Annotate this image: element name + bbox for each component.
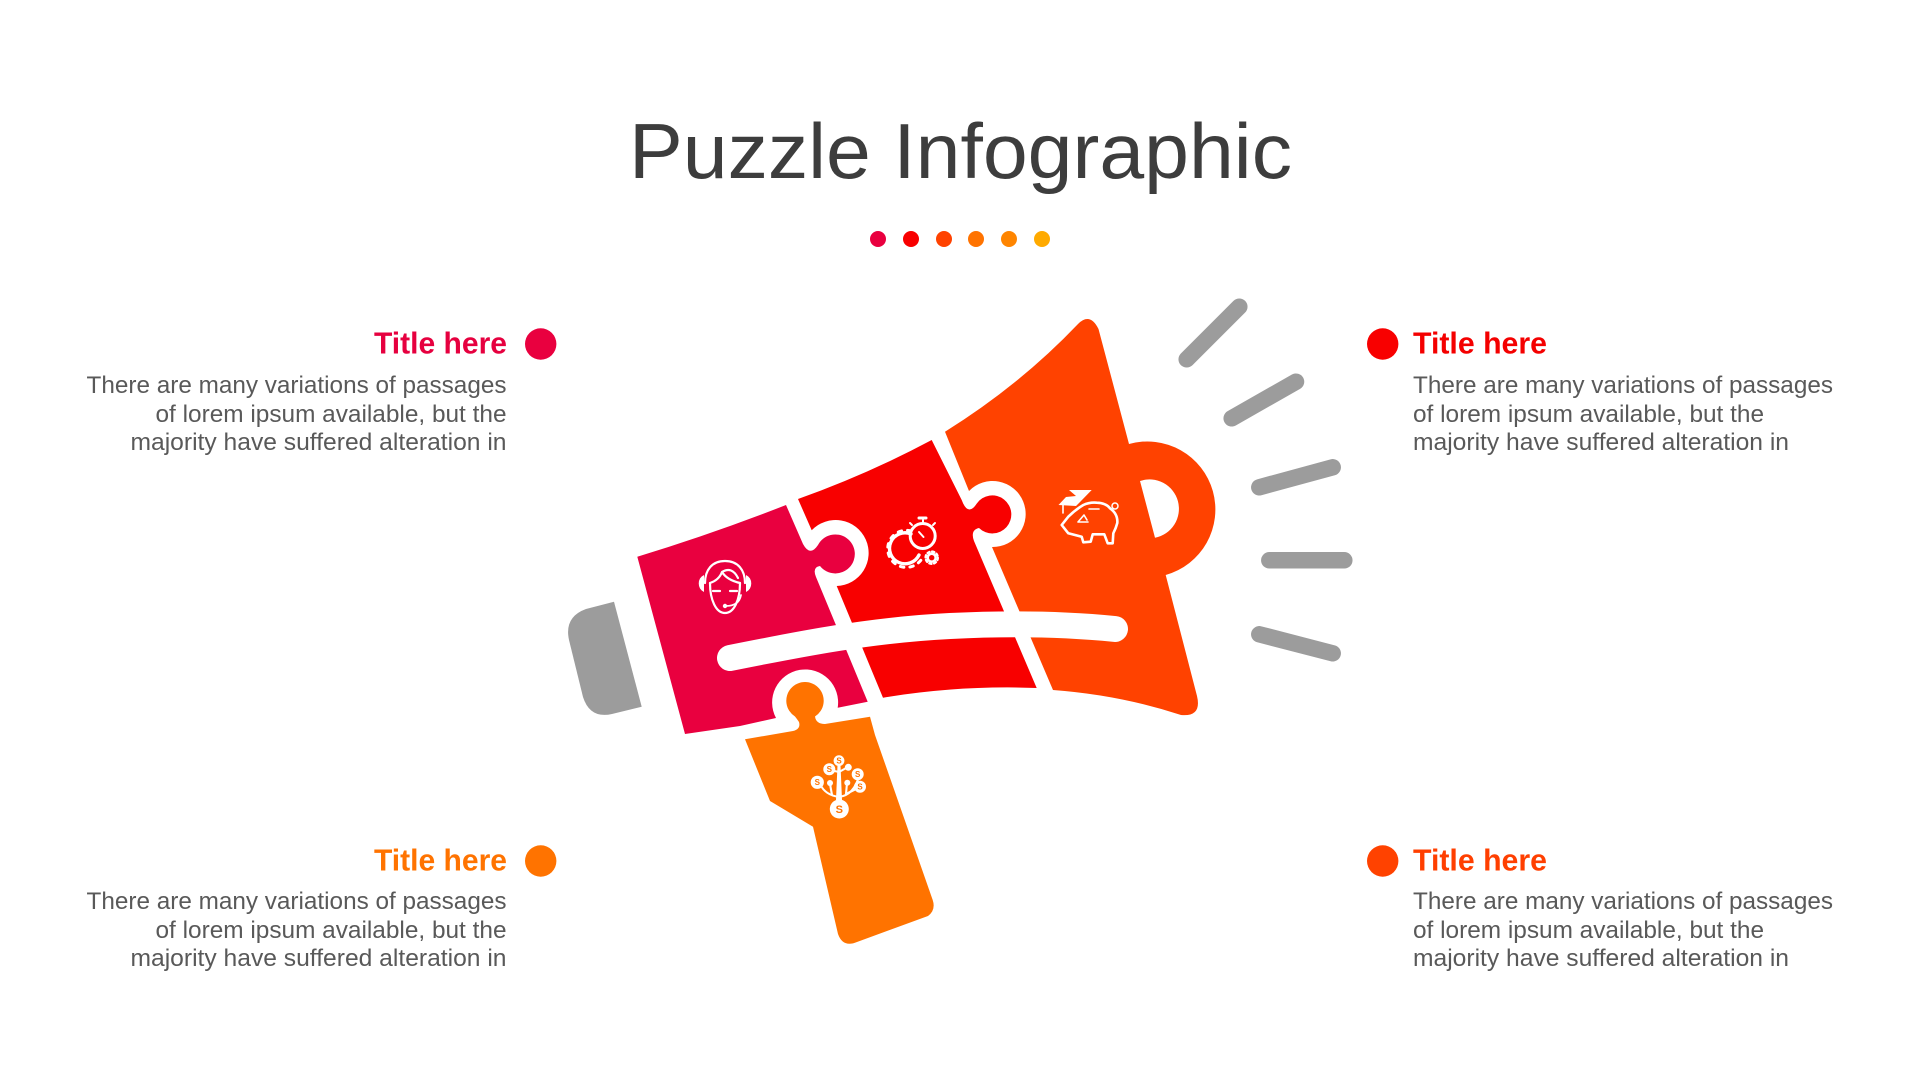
icon: gears and stopwatch <box>888 518 938 567</box>
icon: money tree: S <box>857 783 863 792</box>
title: Puzzle Infographic <box>629 107 1292 195</box>
icon: money tree: S <box>815 778 821 787</box>
panel: top right text <box>1367 325 1833 456</box>
panel: top right text: of lorem ipsum available, but the <box>1413 401 1764 428</box>
panel: bottom right text: of lorem ipsum available, but the <box>1413 917 1764 944</box>
icon: money tree: S <box>836 757 842 766</box>
panel: top left text <box>86 325 556 456</box>
puzzle piece: crimson <box>637 505 868 734</box>
panel: top left text: majority have suffered alteration in <box>130 429 506 456</box>
puzzle piece: orange-red bell <box>945 319 1215 715</box>
icon: money tree <box>811 755 866 818</box>
icon: money tree: S <box>855 770 861 779</box>
puzzle piece: red <box>798 440 1037 698</box>
title dots <box>870 231 1050 247</box>
panel: bottom left text: majority have suffered alteration in <box>130 945 506 972</box>
panel: top right text: Title here <box>1413 325 1547 360</box>
panel: bottom right text: majority have suffered alteration in <box>1413 945 1789 972</box>
panel: top left text: There are many variations of passages <box>86 372 507 399</box>
panel: top right text: There are many variations of passages <box>1413 372 1833 399</box>
panel: bottom left text: of lorem ipsum available, but the <box>156 917 507 944</box>
panel: bottom left text <box>86 842 556 972</box>
icon: money tree: S <box>827 765 833 774</box>
icon: headset agent <box>699 561 751 613</box>
panel: bottom left text: There are many variations of passages <box>86 888 507 915</box>
panel: bottom right text: There are many variations of passages <box>1413 888 1833 915</box>
megaphone white band <box>730 624 1115 658</box>
megaphone back cap <box>568 602 642 715</box>
panel: top left text: of lorem ipsum available, but the <box>156 401 507 428</box>
panel: top right text: majority have suffered alteration in <box>1413 429 1789 456</box>
icon: money tree: S <box>836 804 843 816</box>
icon: piggy bank with graduation cap <box>1058 490 1118 543</box>
panel: top left text: Title here <box>374 325 507 360</box>
panel: bottom left text: Title here <box>374 842 507 877</box>
puzzle piece: orange handle <box>745 682 934 944</box>
sound rays <box>1187 307 1344 653</box>
panel: bottom right text <box>1367 842 1833 972</box>
panel: bottom right text: Title here <box>1413 842 1547 877</box>
